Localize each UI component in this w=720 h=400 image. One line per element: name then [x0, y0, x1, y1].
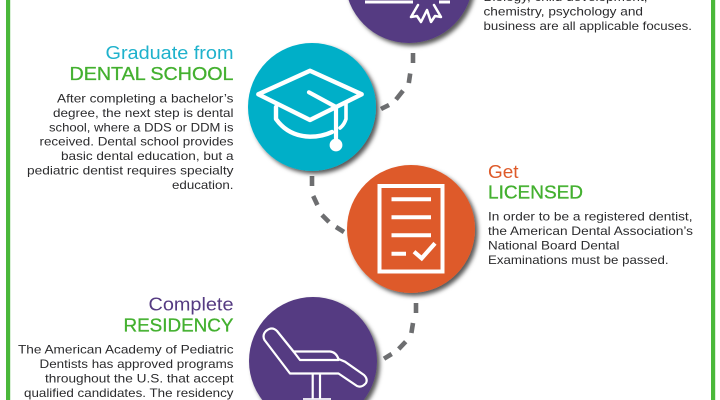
- step: bachelor's degree: [345, 0, 692, 43]
- icon: checklist document: [380, 186, 442, 272]
- icon: diploma with ribbon: [365, 2, 450, 22]
- text: residency description: [18, 342, 234, 400]
- heading: complete residency: [124, 294, 234, 335]
- text: dental school description: education.: [172, 178, 234, 192]
- text: licensing description: Examinations must be passed.: [488, 253, 668, 267]
- text: licensing description: the American Dental Association’s: [488, 224, 693, 238]
- step: get licensed: [347, 161, 693, 293]
- heading: get licensed: [488, 161, 583, 203]
- text: residency description: Dentists has approved programs: [40, 357, 234, 371]
- icon: graduation cap: [258, 71, 362, 151]
- text: residency description: qualified candidates. The residency: [24, 386, 234, 400]
- text: residency description: throughout the U.S. that accept: [45, 371, 234, 385]
- circle: purple degree: [345, 0, 473, 43]
- text: dental school description: After completing a bachelor’s: [57, 92, 234, 106]
- text: dental school description: pediatric dentist requires specialty: [27, 164, 234, 178]
- text: dental school description: degree, the next step is dental: [53, 106, 234, 120]
- step: dental school: [27, 42, 376, 192]
- step: complete residency: [18, 294, 377, 400]
- text: dental school description: school, where a DDS or DDM is: [49, 120, 234, 134]
- heading: complete residency: RESIDENCY: [124, 314, 234, 335]
- dashed connector: bachelor to dental school: [381, 53, 413, 109]
- heading: graduate from dental school: [70, 42, 234, 84]
- circle: teal dental school: [248, 43, 376, 171]
- text: licensing description: National Board Dental: [488, 238, 620, 252]
- dashed connector: dental school to licensed: [312, 176, 344, 232]
- heading: complete residency: Complete: [148, 294, 234, 315]
- heading: get licensed: Get: [488, 161, 519, 182]
- text: bachelor's focuses: chemistry, psychology and: [484, 4, 643, 18]
- text: licensing description: In order to be a registered dentist,: [488, 210, 692, 224]
- dashed connector: licensed to residency: [384, 303, 416, 359]
- text: bachelor's focuses: [484, 0, 692, 33]
- heading: get licensed: LICENSED: [488, 182, 583, 203]
- heading: graduate from dental school: Graduate from: [106, 42, 234, 63]
- text: bachelor's focuses: business are all applicable focuses.: [484, 19, 692, 33]
- icon: dental chair: [264, 328, 367, 400]
- circle: purple residency: [249, 297, 377, 400]
- circle: orange licensed: [347, 165, 475, 293]
- text: residency description: The American Academy of Pediatric: [18, 342, 234, 356]
- text: licensing description: [488, 210, 693, 267]
- text: dental school description: [27, 92, 234, 192]
- text: dental school description: received. Dental school provides: [40, 134, 234, 148]
- heading: graduate from dental school: DENTAL SCHOOL: [70, 63, 234, 84]
- text: dental school description: basic dental education, but a: [61, 149, 234, 163]
- left green border: [6, 0, 10, 400]
- right green border: [711, 0, 715, 400]
